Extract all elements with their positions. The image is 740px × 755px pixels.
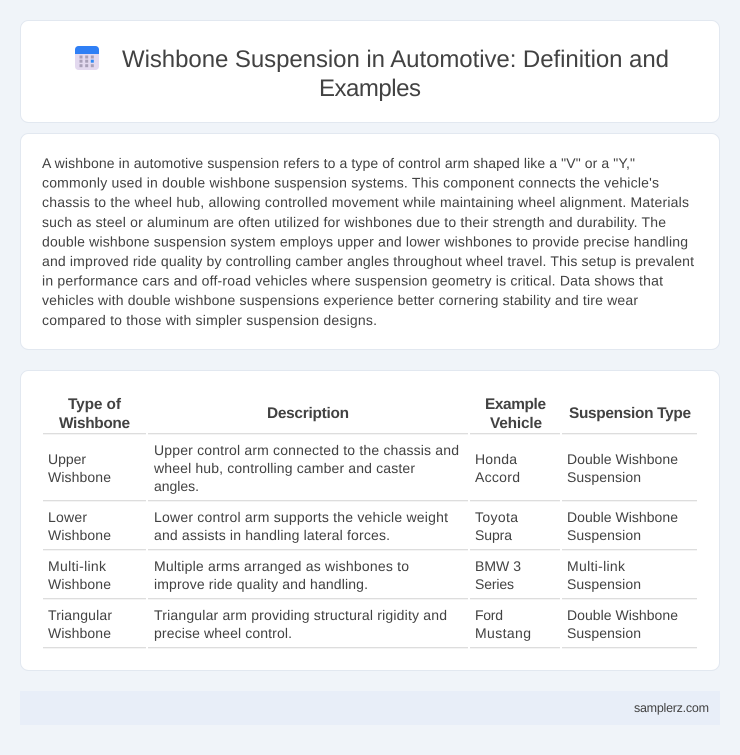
table header row: Type of: [68, 396, 122, 413]
table row: multi-link wishbone: Multiple arms arranged as wishbones to: [154, 558, 409, 574]
table row: upper wishbone: Wishbone: [48, 469, 111, 485]
table row: multi-link wishbone: Wishbone: [48, 576, 111, 592]
table row: upper wishbone: Accord: [475, 469, 520, 485]
title: Wishbone Suspension in Automotive: Definition and: [122, 46, 669, 73]
table row: upper wishbone: Double Wishbone: [567, 451, 678, 467]
table row: upper wishbone: wheel hub, controlling camber and caster: [153, 460, 415, 476]
table row: multi-link wishbone: Series: [475, 576, 514, 592]
text block: definition: chassis to the wheel hub, allowing controlled movement while maintaining wheel alignment. Materials: [42, 194, 689, 210]
table row: upper wishbone: Honda: [475, 451, 517, 467]
text block: definition: in performance cars and off-road vehicles where suspension geometry is critical. Data shows that: [42, 273, 663, 289]
table row: triangular wishbone: precise wheel control.: [154, 625, 292, 641]
table header row: Wishbone: [59, 415, 130, 432]
table row: triangular wishbone: Triangular: [48, 607, 112, 623]
table row: multi-link wishbone: Multi-link: [567, 558, 626, 574]
text block: definition: compared to those with simpler suspension designs.: [42, 312, 377, 328]
text block: definition: such as steel or aluminum are often utilized for wishbones due to their strength and durability. The: [42, 214, 666, 230]
table header row: Example: [485, 396, 546, 413]
table row: multi-link wishbone: Multi-link: [48, 558, 107, 574]
table row: triangular wishbone: [43, 607, 697, 648]
panel: header: [20, 20, 720, 122]
table row: upper wishbone: [43, 442, 697, 501]
table header row: Vehicle: [490, 415, 542, 432]
table row: multi-link wishbone: Suspension: [567, 576, 641, 592]
table row: multi-link wishbone: [43, 558, 697, 599]
table row: triangular wishbone: Double Wishbone: [567, 607, 678, 623]
table header row: Description: [267, 405, 349, 422]
title: Examples: [319, 75, 421, 102]
table row: multi-link wishbone: improve ride quality and handling.: [154, 576, 368, 592]
table row: multi-link wishbone: BMW 3: [475, 558, 521, 574]
table row: upper wishbone: Suspension: [567, 469, 641, 485]
panel: table: [20, 370, 720, 670]
footer: samplerz.com: [634, 701, 709, 715]
table row: triangular wishbone: Triangular arm providing structural rigidity and: [154, 607, 447, 623]
table header row: Suspension Type: [569, 405, 691, 422]
table header row: [43, 396, 697, 434]
table row: lower wishbone: Supra: [475, 527, 512, 543]
table row: lower wishbone: Lower control arm supports the vehicle weight: [154, 509, 448, 525]
text block: definition: A wishbone in automotive suspension refers to a type of control arm shaped like a "V" or a "Y,": [42, 155, 635, 171]
table row: triangular wishbone: Mustang: [475, 625, 531, 641]
table row: triangular wishbone: Suspension: [567, 625, 641, 641]
table row: lower wishbone: Double Wishbone: [567, 509, 678, 525]
panel: description paragraph: [20, 134, 720, 350]
table row: upper wishbone: Upper control arm connected to the chassis and: [154, 442, 459, 458]
text block: definition: [42, 155, 694, 328]
table row: triangular wishbone: Ford: [475, 607, 503, 623]
table row: lower wishbone: and assists in handling lateral forces.: [154, 527, 390, 543]
icon: calendar: [75, 46, 99, 70]
table row: lower wishbone: Lower: [48, 509, 87, 525]
table row: lower wishbone: [43, 509, 697, 550]
table row: triangular wishbone: Wishbone: [48, 625, 111, 641]
title: [122, 46, 669, 102]
text block: definition: and improved ride quality by controlling camber angles throughout wheel travel. This setup is prevalent: [42, 253, 694, 269]
table row: upper wishbone: Upper: [48, 451, 86, 467]
table row: lower wishbone: Suspension: [567, 527, 641, 543]
footer: [20, 691, 720, 725]
text block: definition: vehicles with double wishbone suspensions experience better cornering stability and tire wear: [42, 292, 638, 308]
text block: definition: double wishbone suspension system employs upper and lower wishbones to provide precise handling: [42, 233, 688, 249]
table row: upper wishbone: angles.: [154, 478, 199, 494]
table row: lower wishbone: Wishbone: [48, 527, 111, 543]
table row: lower wishbone: Toyota: [475, 509, 518, 525]
text block: definition: commonly used in double wishbone suspension systems. This component connects the vehicle's: [42, 175, 659, 191]
